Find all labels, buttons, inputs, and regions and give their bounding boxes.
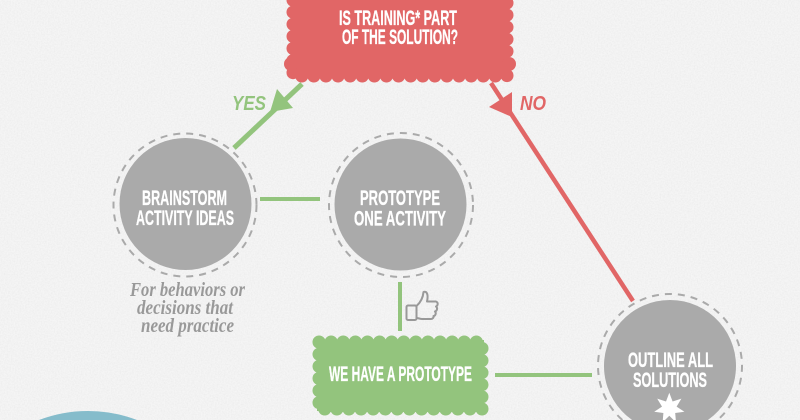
blue circle at bottom left — [39, 411, 137, 420]
node: outline all solutions — [598, 294, 742, 420]
node: brainstorm activity ideas: BRAINSTORM — [142, 187, 227, 210]
decision box: is training part of the solution — [284, 0, 516, 78]
no label: NO — [520, 93, 546, 115]
connector: brainstorm to prototype — [260, 197, 320, 201]
node: outline all solutions: OUTLINE ALL — [628, 349, 713, 372]
decision box: is training part of the solution: OF THE SOLUTION? — [342, 26, 458, 49]
note: for behaviors or decisions: decisions that — [137, 297, 234, 319]
node: brainstorm activity ideas: ACTIVITY IDEAS — [136, 207, 234, 230]
node: prototype one activity: ONE ACTIVITY — [354, 208, 446, 230]
note: for behaviors or decisions: need practice — [141, 315, 234, 337]
note: for behaviors or decisions: For behaviors or — [129, 279, 245, 301]
node: brainstorm activity ideas — [114, 134, 256, 276]
connector: green box to outline — [495, 373, 592, 377]
node: prototype one activity — [329, 133, 473, 277]
result box: we have a prototype — [317, 340, 484, 411]
icon: thumbs up — [406, 292, 438, 320]
yes arrow — [234, 84, 302, 148]
no arrow — [489, 83, 633, 301]
icon: white star — [654, 393, 684, 420]
decision box: is training part of the solution: IS TRAINING* PART — [339, 7, 457, 30]
result box: we have a prototype: WE HAVE A PROTOTYPE — [329, 363, 472, 386]
node: outline all solutions: SOLUTIONS — [633, 369, 707, 392]
node: prototype one activity: PROTOTYPE — [360, 187, 440, 210]
yes label: YES — [232, 93, 267, 115]
connector: prototype to green box — [398, 282, 402, 331]
note: for behaviors or decisions — [129, 279, 245, 337]
